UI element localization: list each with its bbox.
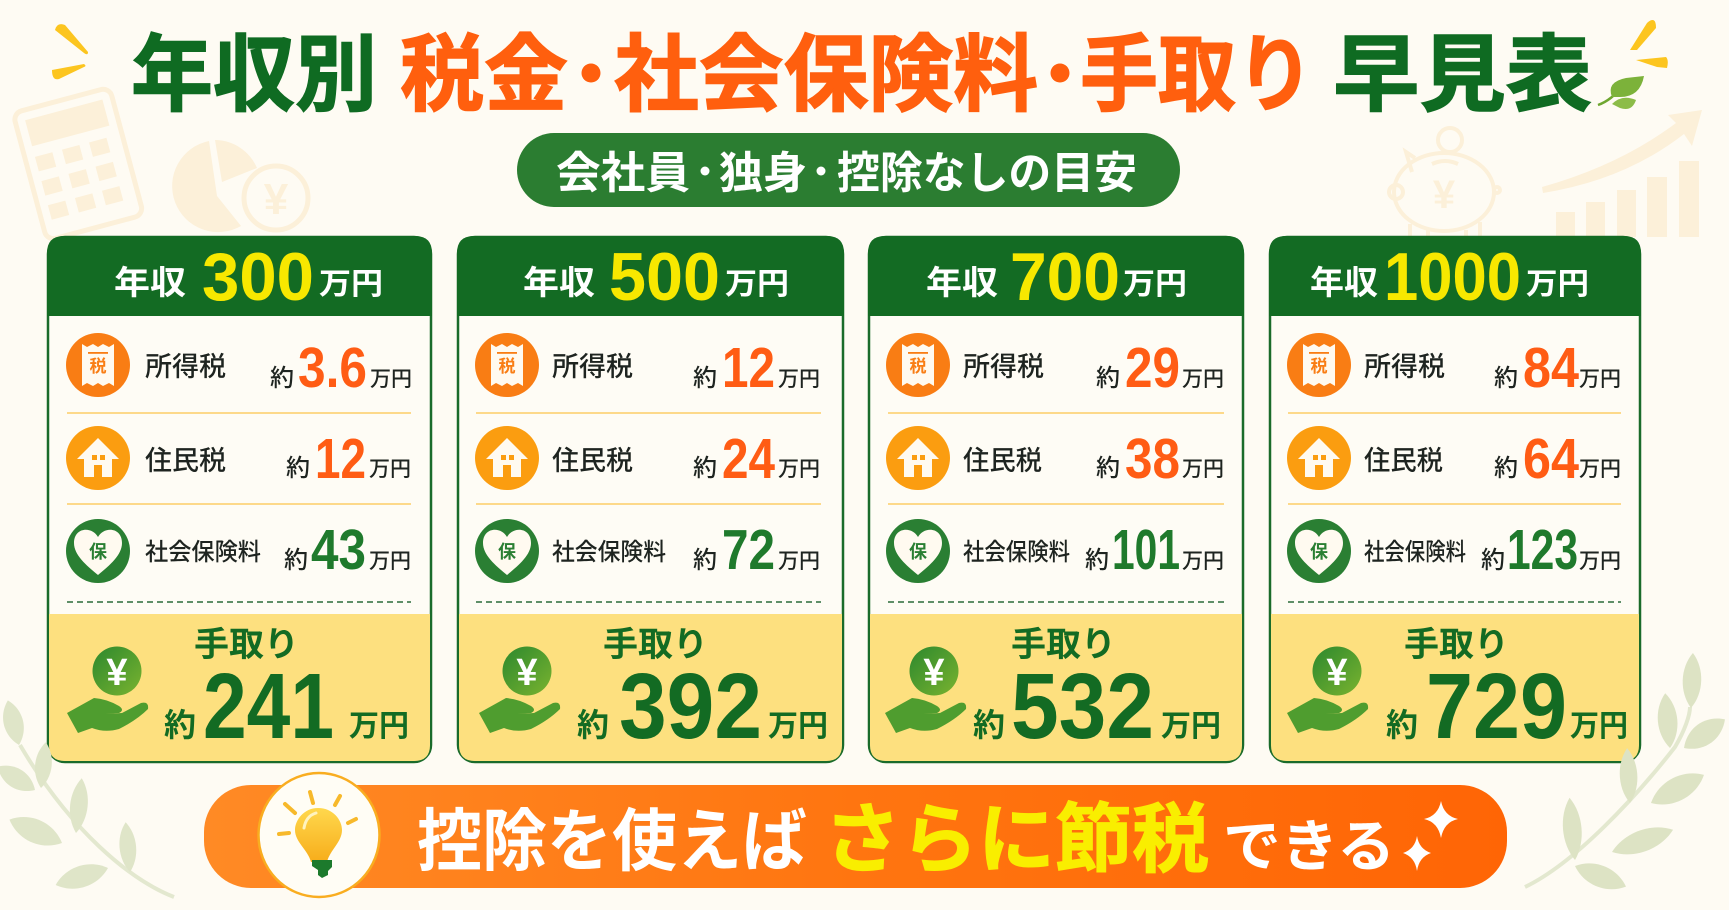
- card header: 万円: [319, 268, 383, 301]
- row: 社会保険料: [552, 518, 820, 582]
- row: 所得税: 所得税: [1364, 352, 1445, 382]
- row: 住民税: 約: [693, 455, 717, 482]
- row: 住民税: 住民税: [1364, 446, 1443, 476]
- divider: [1288, 601, 1621, 603]
- divider: [888, 601, 1224, 603]
- row: 所得税: 万円: [1579, 368, 1621, 391]
- title: 社会保険料: [614, 28, 1038, 122]
- icon: hand with yen coin: [885, 646, 966, 733]
- card: 1000万円: [1269, 236, 1641, 762]
- icon: hand with yen coin: ¥: [923, 652, 945, 694]
- row: 住民税: [963, 427, 1224, 491]
- icon: resident tax house: [886, 426, 950, 490]
- row: 住民税: [1364, 427, 1621, 491]
- take-home pay: 万円: [1570, 710, 1628, 743]
- row: 社会保険料: 43: [311, 518, 366, 582]
- icon: resident tax house: [475, 426, 539, 490]
- icon: income tax receipt: [66, 333, 130, 397]
- row: 社会保険料: [145, 518, 411, 582]
- row: 住民税: [145, 427, 411, 491]
- row: 住民税: 万円: [1579, 458, 1621, 481]
- icon: hand with yen coin: [1287, 646, 1368, 733]
- row: 住民税: 万円: [1182, 458, 1224, 481]
- icon: rising bars and arrow watermark: [1542, 110, 1702, 237]
- card header: [926, 239, 1187, 315]
- icon: income tax receipt: [475, 333, 539, 397]
- row: 社会保険料: 万円: [369, 550, 411, 573]
- take-home pay: 手取り: [1011, 626, 1116, 664]
- take-home pay: 手取り: [603, 626, 708, 664]
- divider: [476, 412, 821, 414]
- card: 500万円: [457, 236, 844, 762]
- row: 住民税: 住民税: [145, 446, 226, 476]
- card: 300万円: [47, 236, 432, 762]
- card frame: [1269, 236, 1641, 762]
- subtitle pill: 控除なしの目安: [837, 149, 1137, 198]
- row: 住民税: 住民税: [963, 446, 1042, 476]
- card header: 万円: [1526, 268, 1589, 301]
- take-home pay: 手取り: [194, 626, 299, 664]
- icon: income tax receipt: 税: [90, 357, 106, 376]
- icon: hand with yen coin: [479, 646, 560, 733]
- divider: [888, 503, 1224, 505]
- take-home pay: 万円: [768, 710, 828, 743]
- row: 社会保険料: 社会保険料: [145, 539, 261, 566]
- title: 早見表: [1333, 28, 1592, 122]
- row: 所得税: 約: [693, 365, 717, 392]
- card header: 年収: [926, 264, 998, 301]
- row: 住民税: 64: [1523, 427, 1579, 491]
- icon: pie chart and yen coin watermark: ¥: [264, 175, 289, 224]
- row: 住民税: 約: [286, 455, 310, 482]
- take-home pay: 約: [1386, 707, 1418, 743]
- icon: hand with yen coin: ¥: [106, 652, 128, 694]
- icon: social insurance heart: 保: [89, 542, 107, 562]
- row: 住民税: 万円: [778, 458, 820, 481]
- card header: 万円: [1123, 268, 1187, 301]
- take-home pay: [164, 626, 409, 758]
- card frame: [457, 236, 844, 762]
- icon: bottom-left leaf branch: [0, 698, 174, 897]
- icon: income tax receipt: 税: [498, 357, 516, 376]
- row: 所得税: 12: [722, 336, 775, 400]
- title: 手取り: [1080, 28, 1314, 122]
- banner background: [204, 785, 1507, 888]
- row: 所得税: 約: [1096, 365, 1120, 392]
- icon: resident tax house: [1287, 426, 1351, 490]
- icon: income tax receipt: [886, 333, 950, 397]
- card header: 年収: [114, 264, 186, 301]
- take-home pay: 約: [164, 707, 196, 743]
- icon: top-left yellow sparks: [52, 24, 88, 79]
- take-home pay: [973, 626, 1221, 758]
- subtitle pill: 独身: [719, 149, 807, 198]
- row: 所得税: 84: [1523, 336, 1579, 400]
- row: 社会保険料: 101: [1112, 518, 1180, 582]
- icon: hand with yen coin: [67, 646, 148, 733]
- title: 税金: [400, 28, 568, 122]
- banner message: さらに節税: [824, 798, 1209, 883]
- row: 所得税: 万円: [1182, 368, 1224, 391]
- row: 所得税: 約: [270, 365, 294, 392]
- row: 所得税: 所得税: [145, 352, 226, 382]
- divider: [67, 412, 411, 414]
- icon: sparkles: [1403, 801, 1458, 871]
- row: 所得税: 万円: [778, 368, 820, 391]
- row: 社会保険料: 約: [1085, 547, 1109, 574]
- icon: social insurance heart: 保: [498, 542, 516, 562]
- card header: [523, 239, 789, 315]
- card header: 1000: [1384, 239, 1521, 315]
- icon: pie chart and yen coin watermark: [172, 140, 308, 232]
- row: 所得税: 約: [1494, 365, 1518, 392]
- row: 社会保険料: 万円: [778, 550, 820, 573]
- row: 所得税: [1364, 336, 1621, 400]
- take-home pay: 約: [973, 707, 1005, 743]
- take-home pay: 約: [577, 707, 609, 743]
- row: 社会保険料: [1364, 518, 1621, 582]
- divider: [67, 503, 411, 505]
- banner message: [417, 798, 1395, 883]
- row: 所得税: [145, 336, 412, 400]
- icon: piggy bank watermark: [1389, 128, 1500, 236]
- icon: top-right sparks and leaf: [1598, 20, 1668, 109]
- row: 社会保険料: 約: [1481, 547, 1505, 574]
- icon: bottom-right leaf branch: [1525, 653, 1729, 897]
- icon: income tax receipt: 税: [910, 357, 926, 376]
- icon: hand with yen coin: ¥: [516, 652, 538, 694]
- icon: social insurance heart: [886, 519, 950, 583]
- row: 住民税: 万円: [369, 458, 411, 481]
- icon: social insurance heart: [66, 519, 130, 583]
- row: 住民税: 24: [722, 427, 775, 491]
- icon: income tax receipt: [1287, 333, 1351, 397]
- icon: calculator watermark: [13, 87, 144, 241]
- card frame: [47, 236, 432, 762]
- divider: [1288, 412, 1621, 414]
- row: 社会保険料: 社会保険料: [963, 539, 1070, 566]
- take-home pay: [1386, 626, 1628, 758]
- icon: social insurance heart: [475, 519, 539, 583]
- row: 社会保険料: 万円: [1182, 550, 1224, 573]
- row: 住民税: 約: [1096, 455, 1120, 482]
- divider: [476, 601, 821, 603]
- card header: 万円: [725, 268, 789, 301]
- icon: light bulb: [258, 773, 380, 897]
- take-home pay: 手取り: [1404, 626, 1509, 664]
- divider: [888, 412, 1224, 414]
- row: 社会保険料: 約: [284, 547, 308, 574]
- title: [131, 28, 1592, 122]
- card header: [114, 239, 383, 315]
- icon: hand with yen coin: ¥: [1326, 652, 1348, 694]
- title: 年収別: [131, 28, 377, 122]
- row: 所得税: 所得税: [963, 352, 1044, 382]
- row: 社会保険料: 社会保険料: [1364, 539, 1466, 566]
- row: 社会保険料: [963, 518, 1224, 582]
- subtitle pill: [517, 133, 1180, 207]
- row: 住民税: 12: [315, 427, 366, 491]
- take-home pay: [577, 626, 828, 758]
- banner message: できる: [1223, 815, 1395, 878]
- row: 社会保険料: 123: [1507, 518, 1578, 582]
- row: 所得税: 3.6: [298, 336, 367, 400]
- card header: 300: [202, 239, 314, 315]
- take-home pay: 532: [1011, 654, 1154, 758]
- row: 所得税: [963, 336, 1224, 400]
- row: 住民税: 約: [1494, 455, 1518, 482]
- take-home pay: 万円: [1161, 710, 1221, 743]
- icon: piggy bank watermark: ¥: [1433, 173, 1456, 217]
- take-home pay: 392: [619, 654, 762, 758]
- icon: social insurance heart: [1287, 519, 1351, 583]
- card header: 年収: [1310, 264, 1378, 301]
- row: 住民税: 住民税: [552, 446, 633, 476]
- row: 所得税: 所得税: [552, 352, 633, 382]
- row: 所得税: 29: [1125, 336, 1180, 400]
- icon: income tax receipt: 税: [1310, 357, 1328, 376]
- icon: resident tax house: [66, 426, 130, 490]
- row: 所得税: 万円: [370, 368, 412, 391]
- divider: [476, 503, 821, 505]
- row: 社会保険料: 72: [722, 518, 775, 582]
- take-home pay: 241: [203, 654, 334, 758]
- divider: [67, 601, 411, 603]
- row: 社会保険料: 万円: [1579, 550, 1621, 573]
- card header: 年収: [523, 264, 595, 301]
- bottom banner: [204, 773, 1507, 897]
- card header: [1310, 239, 1589, 315]
- take-home pay: 万円: [349, 710, 409, 743]
- card frame: [868, 236, 1244, 762]
- icon: social insurance heart: 保: [909, 542, 927, 562]
- row: 所得税: [552, 336, 820, 400]
- banner message: 控除を使えば: [417, 804, 807, 880]
- row: 住民税: 38: [1125, 427, 1180, 491]
- card header: 700: [1010, 239, 1120, 315]
- divider: [1288, 503, 1621, 505]
- row: 住民税: [552, 427, 820, 491]
- icon: social insurance heart: 保: [1310, 542, 1328, 562]
- row: 社会保険料: 社会保険料: [552, 539, 666, 566]
- subtitle pill: 会社員: [556, 149, 690, 198]
- card header: 500: [609, 239, 720, 315]
- row: 社会保険料: 約: [693, 547, 717, 574]
- take-home pay: 729: [1426, 654, 1567, 758]
- card: 700万円: [868, 236, 1244, 762]
